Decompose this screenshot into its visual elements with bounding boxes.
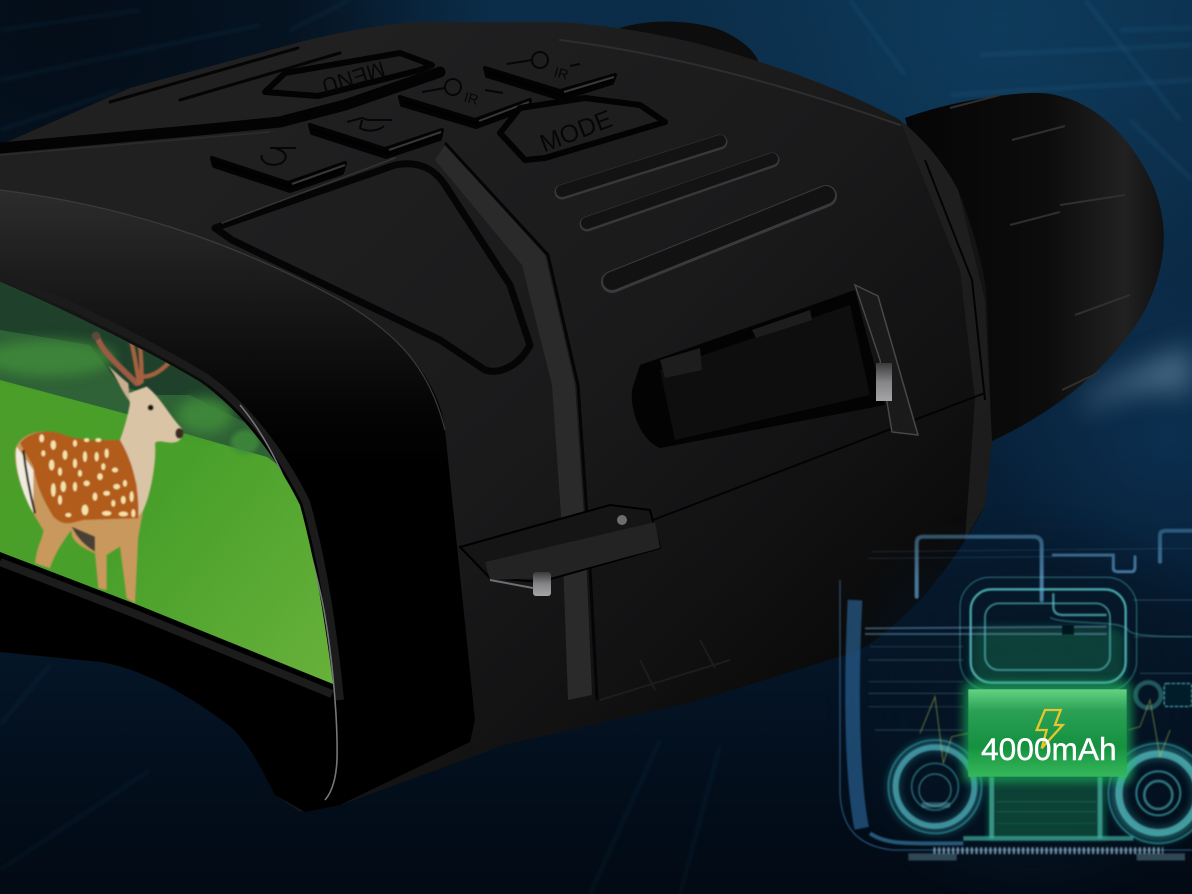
button: IR minus [400,79,530,127]
button: menu [265,53,432,99]
button: IR minus: IR [462,89,480,108]
rear barrel [620,22,760,70]
lenses [888,740,1192,843]
front bezel and eyecup [0,190,475,812]
button: menu: MENU [319,56,388,99]
forest in the background [0,282,276,464]
connector [1164,683,1192,707]
housing outline [840,580,1192,850]
button: IR plus: IR [552,64,570,83]
button: mode: MODE [536,105,616,158]
button: camera [310,118,442,157]
green glow column [971,627,1126,840]
right barrel with ticks [905,93,1164,442]
circuit schematic with battery [838,528,1192,862]
battery housing outlines [960,577,1192,691]
battery block: 4000mAh [981,731,1117,767]
bottom connector strip [908,851,1185,861]
battery block [963,683,1132,782]
button: power [212,148,345,191]
lower side seam [640,393,985,525]
dark schematic backing [878,566,948,638]
metal latch [460,505,660,596]
horizontal circuit lines [865,600,1192,730]
light arc on right [1085,345,1192,412]
top face grooves [0,40,900,371]
battery compartment door [632,285,918,448]
button: mode [500,98,665,160]
yellow pulse lines [920,697,1170,763]
body silhouette [0,22,992,812]
lower green section [963,777,1133,838]
blue pipes [868,531,1192,600]
button: IR plus [485,52,615,99]
binocular main body [0,22,992,812]
side ridges [562,141,826,282]
seam band [435,145,592,700]
screen: green meadow with deer [0,270,340,700]
deer [15,332,183,603]
right band [900,120,992,540]
